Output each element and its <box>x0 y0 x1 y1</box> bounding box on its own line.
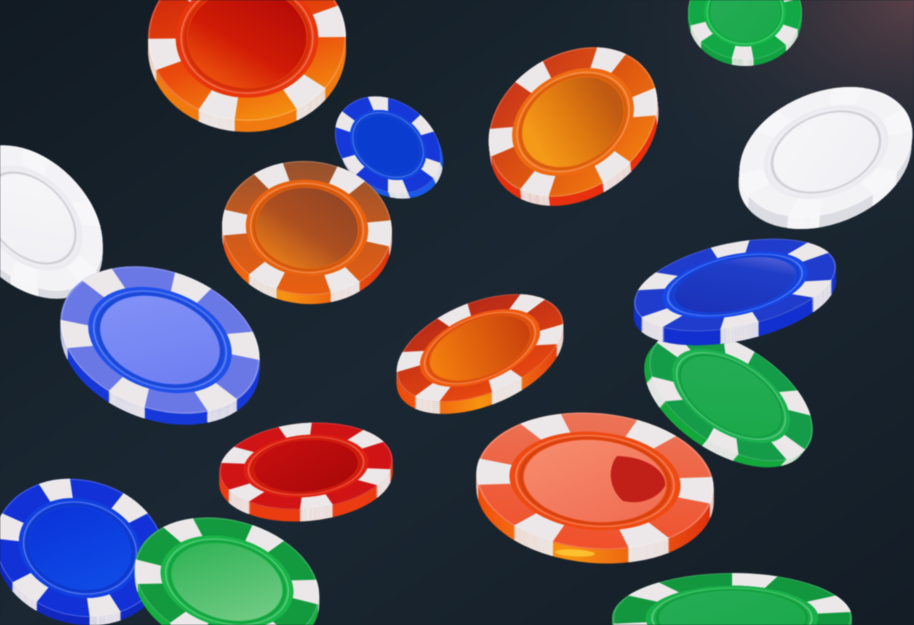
chip: red-orange centre <box>381 272 579 436</box>
chip: green bottom right <box>612 573 852 625</box>
chip: blue right <box>626 223 844 361</box>
chip: light blue left <box>40 240 280 451</box>
chip: green bottom <box>120 498 334 625</box>
chip: green top right <box>688 0 802 66</box>
chip: white right <box>719 63 914 253</box>
chip: green right <box>622 304 835 494</box>
reflection on large orange chip <box>611 456 665 502</box>
highlight on large orange chip rim <box>555 548 595 558</box>
chip: blue bottom left <box>0 460 181 625</box>
chip: large orange <box>471 403 719 573</box>
chip: orange upper right <box>461 17 686 236</box>
chip: small blue <box>316 76 462 219</box>
chip: white left <box>0 117 131 327</box>
chip: orange middle <box>216 154 398 311</box>
chip: orange top centre <box>148 0 346 132</box>
chip: red lower middle <box>216 416 396 528</box>
